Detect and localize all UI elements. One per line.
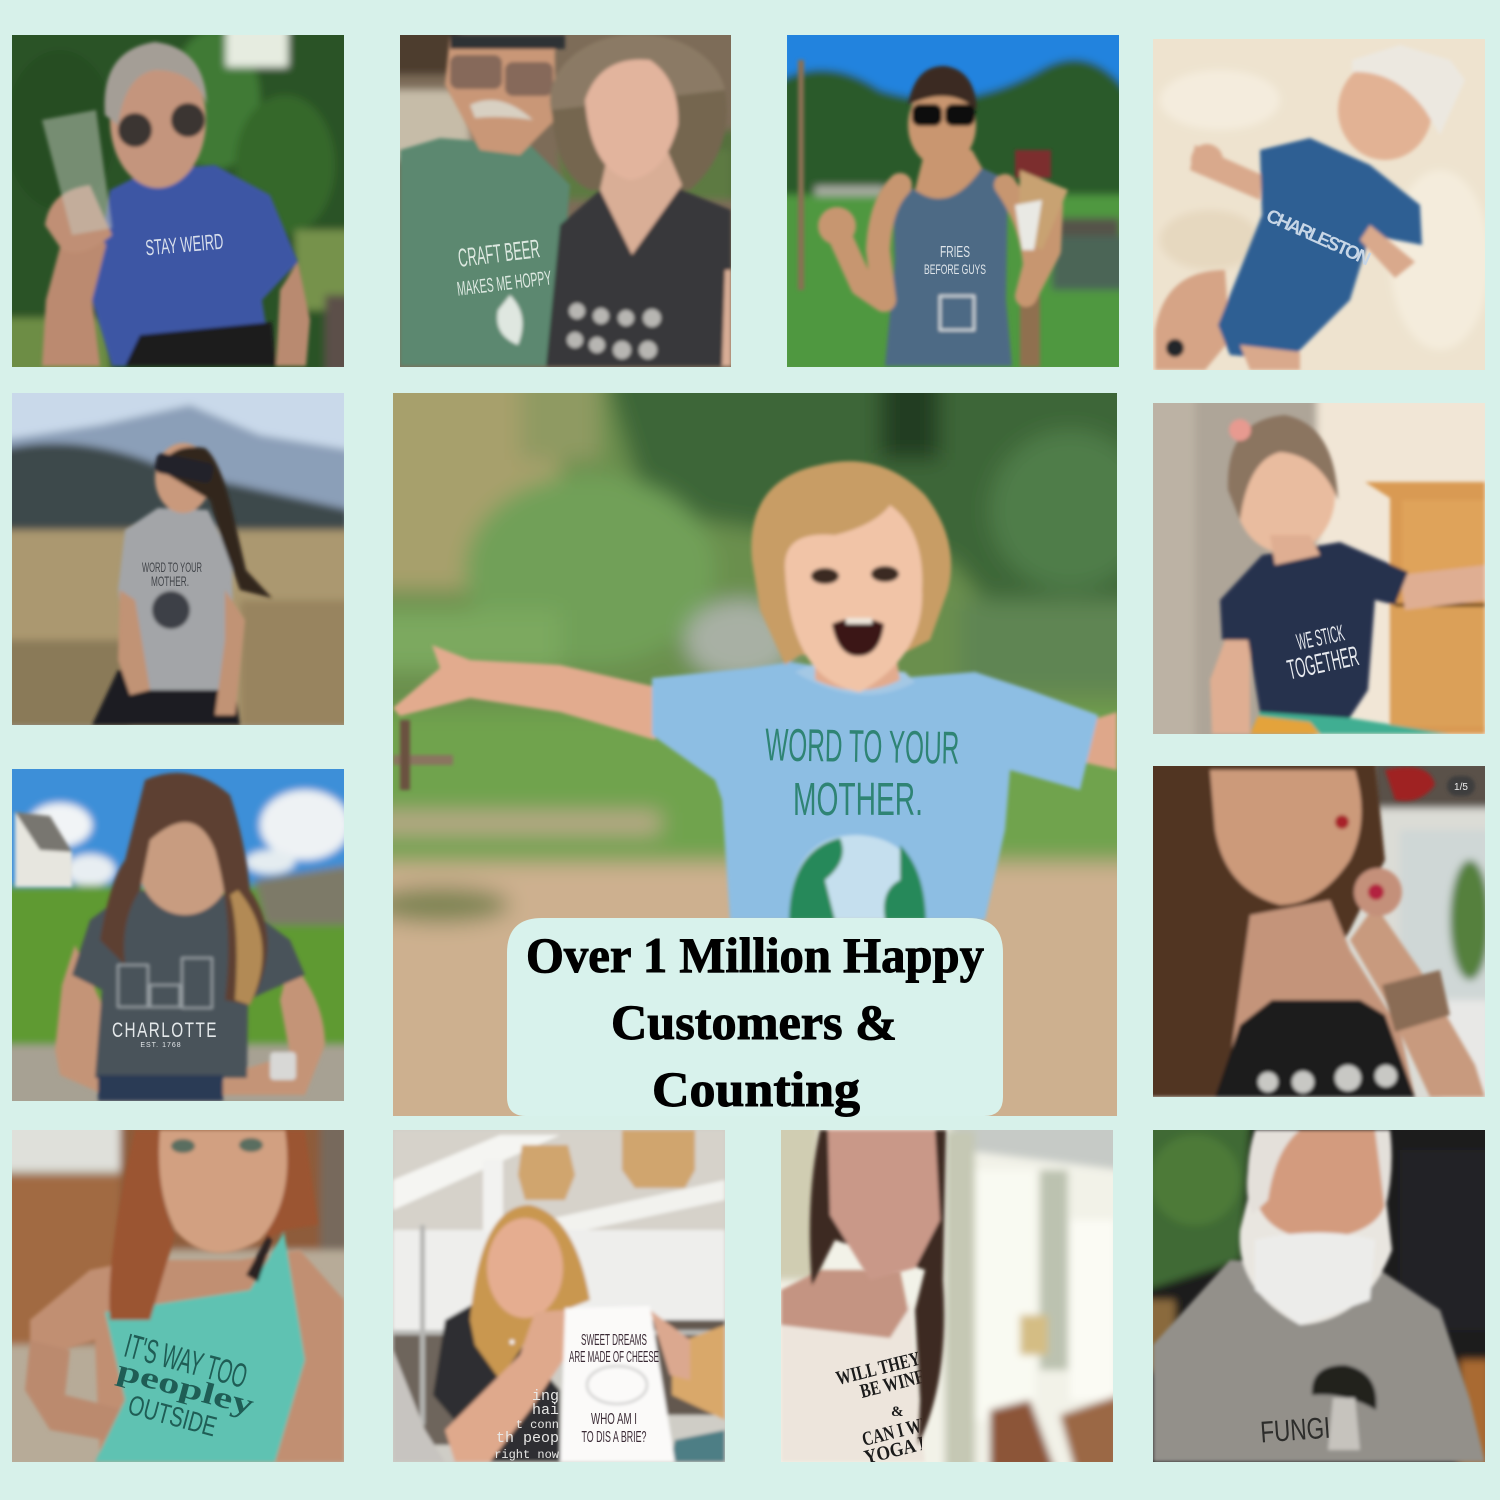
towel text: sweet dreams bbox=[569, 1332, 659, 1446]
shirt text: word to your mother: WORD TO YOUR bbox=[765, 718, 960, 774]
hair and face bbox=[810, 1130, 946, 1445]
shirt text fragment: th peop bbox=[496, 1430, 559, 1447]
photo: woman with long hair in white V-neck by window bbox=[781, 1130, 1113, 1469]
photo: woman in grey shirt on mountain meadow bbox=[12, 393, 344, 725]
shirt text: it's way too peopley outside: IT'S WAY TOO bbox=[121, 1327, 251, 1396]
shirt text: we stick together bbox=[1285, 619, 1361, 685]
photo: baby in navy We Stick Together shirt bbox=[1153, 403, 1485, 734]
shirt text: will they be wine and can I wear yoga pants bbox=[834, 1348, 976, 1469]
caption text: Counting bbox=[652, 1061, 860, 1117]
shirt text: it's way too peopley outside bbox=[114, 1327, 257, 1442]
photo: laughing boy in blue Word to Your Mother shirt bbox=[393, 393, 1117, 1116]
shirt text: craft beer: MAKES ME HOPPY bbox=[456, 267, 553, 301]
shirt text: will they be wine and can I wear yoga pants: & bbox=[891, 1404, 904, 1420]
shirt text: craft beer bbox=[456, 233, 553, 301]
photo: woman in teal tank top bbox=[12, 1130, 344, 1462]
photo: woman with long brown hair and moon phases tank bbox=[1153, 766, 1485, 1097]
shirt text: Charlotte: CHARLOTTE bbox=[112, 1019, 218, 1042]
shirt text: word to your mother: MOTHER. bbox=[151, 573, 189, 589]
shirt text: fries before guys: BEFORE GUYS bbox=[924, 261, 986, 277]
photo: woman in Charlotte shirt under blue sky bbox=[12, 769, 344, 1101]
photo: blonde woman holding Sweet Dreams towel in office bbox=[393, 1130, 725, 1462]
shirt text: word to your mother bbox=[765, 718, 960, 825]
caption text bbox=[526, 927, 984, 1117]
shirt text fragment: t conn bbox=[516, 1418, 559, 1432]
shirt text: Charlotte bbox=[112, 1019, 218, 1049]
shirt text: fries before guys: FRIES bbox=[940, 244, 970, 261]
shirt text: it's way too peopley outside: peopley bbox=[114, 1354, 257, 1422]
photo: bearded man in grey Fungi shirt bbox=[1153, 1130, 1485, 1462]
caption: over 1 million happy customers & counting bbox=[507, 918, 1003, 1117]
caption text: Customers & bbox=[611, 994, 897, 1050]
photo: couple in green and black shirts bbox=[400, 35, 731, 367]
shirt text: craft beer: CRAFT BEER bbox=[456, 233, 541, 273]
shirt text: will they be wine and can I wear yoga pants: BE WINE bbox=[858, 1366, 927, 1403]
towel text: sweet dreams: WHO AM I bbox=[591, 1411, 637, 1428]
shirt text: word to your mother bbox=[142, 559, 202, 589]
towel text: sweet dreams: SWEET DREAMS bbox=[581, 1332, 647, 1349]
shirt text: word to your mother: MOTHER. bbox=[793, 773, 923, 825]
shirt text: Charleston: CHARLESTON bbox=[1263, 206, 1374, 270]
neck, hair, face bbox=[815, 650, 900, 690]
photo: baby in navy We Stick Together shirt: TOGETHER bbox=[1285, 640, 1361, 685]
caption text: Over 1 Million Happy bbox=[526, 927, 984, 983]
photo: man in blue Stay Weird shirt bbox=[12, 35, 344, 367]
earth bbox=[789, 835, 926, 920]
shirt text fragment: right now bbox=[494, 1448, 560, 1462]
blurred park background bbox=[360, 360, 1160, 1152]
shirt text: fries before guys bbox=[924, 244, 986, 277]
shirt text fragment: ing bbox=[532, 1388, 559, 1405]
bench bbox=[393, 755, 453, 765]
shirt text: we stick together: WE STICK bbox=[1294, 619, 1347, 655]
shirt text: fungi: FUNGI bbox=[1259, 1412, 1331, 1449]
arms bbox=[393, 645, 660, 740]
towel text: sweet dreams: TO DIS A BRIE? bbox=[582, 1429, 647, 1446]
photo: woman with sunglasses in tank top by lake bbox=[787, 35, 1119, 367]
shirt text: stay weird: STAY WEIRD bbox=[144, 229, 224, 260]
shirt text fragment: hai bbox=[532, 1402, 559, 1419]
photo counter badge: 1/5 bbox=[1454, 782, 1468, 793]
shirt text fragment bbox=[494, 1388, 560, 1462]
shirt text: Charlotte: EST. 1768 bbox=[140, 1042, 182, 1049]
shirt text: it's way too peopley outside: OUTSIDE bbox=[125, 1389, 220, 1442]
caption background bbox=[507, 918, 1003, 1116]
shirt bbox=[652, 662, 1098, 920]
photo: smiling baby on cream rug in Charleston onesie bbox=[1153, 39, 1485, 370]
shirt text: word to your mother: WORD TO YOUR bbox=[142, 559, 202, 575]
